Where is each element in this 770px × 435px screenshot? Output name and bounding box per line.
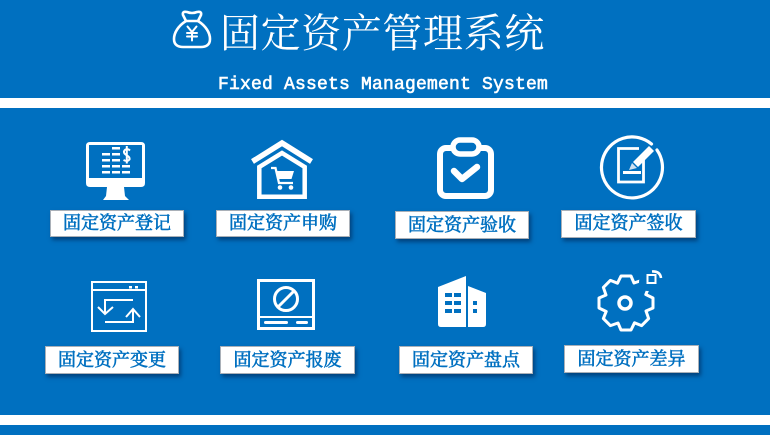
icon: screen with prohibited sign xyxy=(257,279,315,330)
icon: circled note and pen xyxy=(600,135,664,200)
label: acceptance: 固定资产验收 xyxy=(408,215,516,235)
label: discrepancy xyxy=(564,345,699,373)
label: inventory count xyxy=(399,346,533,374)
label: register: 固定资产登记 xyxy=(63,213,171,233)
icon: clipboard check xyxy=(437,137,494,199)
subtitle: Fixed Assets Management System xyxy=(218,75,548,95)
label: discrepancy: 固定资产差异 xyxy=(578,349,686,369)
label: change: 固定资产变更 xyxy=(58,350,166,370)
label: acceptance xyxy=(395,211,529,239)
label: scrap: 固定资产报废 xyxy=(234,350,342,370)
icon: gear with signal xyxy=(598,270,662,332)
label: sign-off: 固定资产签收 xyxy=(574,213,682,233)
label: purchase request: 固定资产申购 xyxy=(229,213,337,233)
label: sign-off xyxy=(561,210,696,238)
icon: window with swap arrows xyxy=(91,281,147,332)
label: register xyxy=(50,210,184,237)
label: inventory count: 固定资产盘点 xyxy=(412,350,520,370)
label: change xyxy=(45,346,179,374)
title: 固定资产管理系统 xyxy=(220,11,545,56)
top white band xyxy=(0,98,770,108)
icon: monitor with ledger xyxy=(86,142,145,200)
label: scrap xyxy=(220,346,355,374)
label: purchase request xyxy=(216,210,350,237)
icon: house with cart xyxy=(251,140,313,199)
icon: money bag xyxy=(172,10,212,48)
icon: office buildings xyxy=(438,276,486,327)
bottom white band xyxy=(0,415,770,425)
